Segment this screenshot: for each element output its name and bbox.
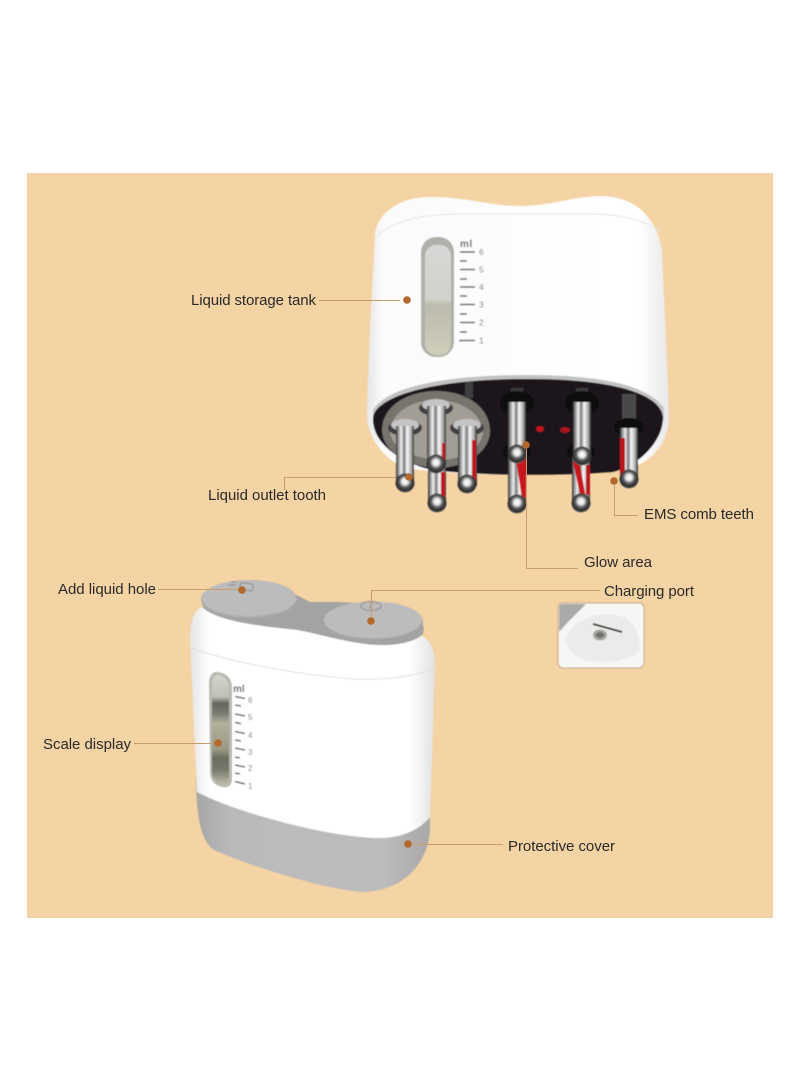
scale: ml ticks: ml — [233, 684, 245, 695]
callout: add liquid hole: Add liquid hole — [58, 581, 156, 598]
callout: scale display — [43, 736, 222, 753]
panel: peach background — [27, 173, 773, 918]
scale: ml ticks: 4 — [479, 282, 484, 292]
scale: ml ticks: 1 — [479, 336, 484, 346]
scale: ml ticks: 2 — [248, 764, 253, 773]
scale: ml ticks: 6 — [479, 247, 484, 257]
body: white housing — [367, 196, 669, 475]
scale: ml ticks: 3 — [248, 748, 253, 757]
scale: ml ticks: 1 — [248, 782, 253, 791]
callout: add liquid hole — [58, 581, 246, 598]
tooth 4 — [428, 468, 446, 512]
button: add liquid hole — [201, 580, 297, 618]
callout: scale display: Scale display — [43, 736, 132, 753]
callout: protective cover: Protective cover — [508, 838, 615, 855]
callout: liquid outlet tooth: Liquid outlet tooth — [208, 487, 326, 504]
scale: ml ticks — [459, 239, 484, 346]
tooth 6 — [503, 442, 531, 514]
callout: charging port: Charging port — [604, 583, 695, 600]
underside: grey rim band — [373, 375, 664, 424]
scale: ml ticks: 4 — [248, 731, 253, 740]
callout: liquid storage tank: Liquid storage tank — [191, 292, 316, 309]
window: scale display — [209, 672, 232, 787]
tooth 2 — [419, 399, 453, 474]
underside: black plate — [373, 379, 663, 475]
glass disc — [382, 391, 490, 468]
scale: ml ticks: 3 — [479, 300, 484, 310]
button: charging port — [323, 601, 423, 642]
body: white housing — [190, 606, 435, 838]
scale: ml ticks: 5 — [479, 264, 484, 274]
tooth 5 — [500, 388, 534, 464]
device: bottom product view — [190, 580, 435, 892]
tooth 3 — [450, 419, 484, 494]
scale: ml ticks: 6 — [248, 696, 253, 705]
callout: EMS comb teeth — [610, 477, 754, 523]
window: liquid level — [421, 237, 454, 357]
callout: liquid storage tank — [191, 292, 411, 309]
lid seam — [191, 648, 435, 679]
tooth 7 — [565, 388, 599, 466]
tooth 8 — [567, 442, 595, 512]
tooth 9 — [614, 394, 644, 488]
callout: EMS comb teeth: EMS comb teeth — [644, 506, 754, 523]
callout: protective cover — [404, 838, 615, 855]
scale: ml ticks: 5 — [248, 713, 253, 722]
device: top product view with comb teeth — [367, 196, 669, 514]
callout: charging port — [367, 583, 695, 625]
scale: ml ticks: ml — [460, 239, 473, 250]
inset: charging port detail — [558, 603, 644, 668]
scale: ml ticks: 2 — [479, 318, 484, 328]
callout: glow area — [522, 441, 653, 571]
scale: ml ticks — [233, 684, 253, 791]
cap: grey plate — [203, 584, 424, 645]
callout: glow area: Glow area — [584, 554, 653, 571]
glow: red lights — [536, 426, 570, 433]
callout: liquid outlet tooth — [208, 473, 413, 504]
cover: grey bottom — [196, 770, 430, 892]
tooth 1 — [388, 419, 422, 492]
lid seam — [377, 214, 661, 236]
